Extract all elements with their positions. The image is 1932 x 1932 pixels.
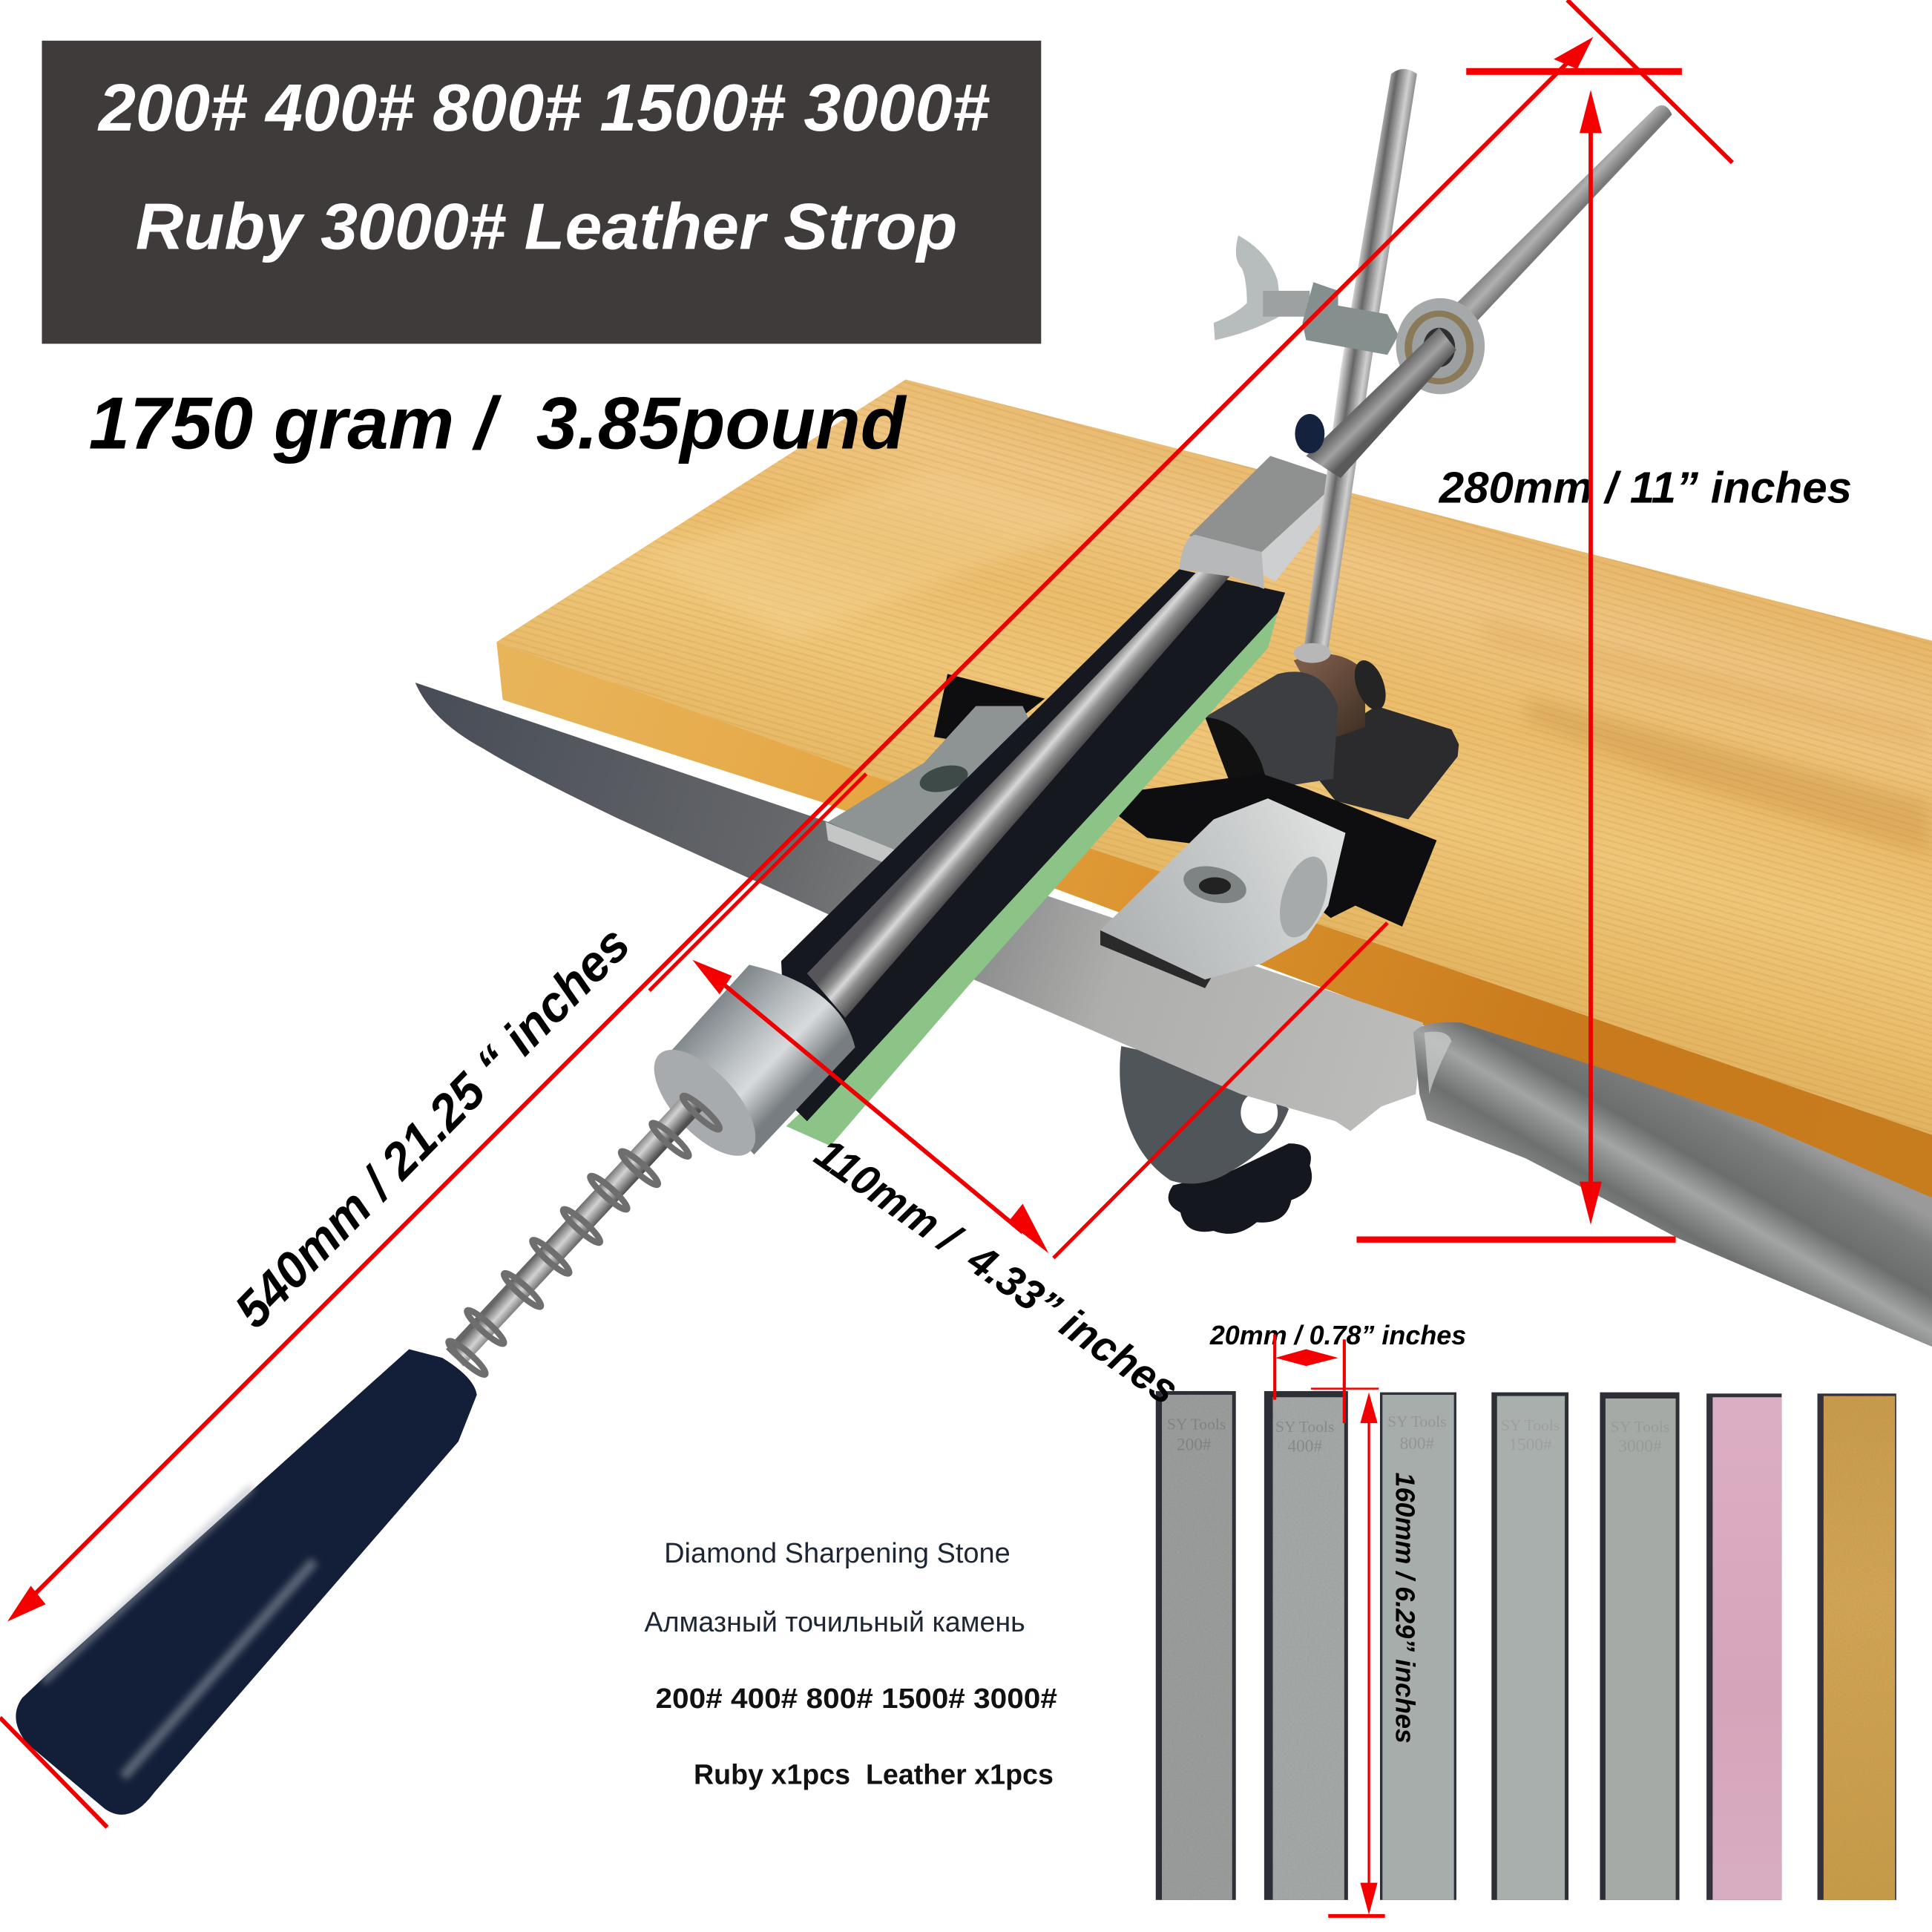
rod clamp assembly (1214, 235, 1485, 478)
leather strop (1818, 1393, 1896, 1900)
rod foot (1294, 643, 1331, 663)
grip body (16, 1349, 477, 1815)
rear rail bracket (934, 674, 1045, 746)
spring coil (1294, 654, 1365, 737)
ruby and leather heading: Ruby 3000# Leather Strop (136, 189, 957, 263)
top block side (1262, 479, 1341, 582)
arrow: stone width 20mm (1275, 1335, 1344, 1423)
board front face (496, 642, 1932, 1214)
stone 3000#: SY Tools (1611, 1418, 1669, 1436)
weight label: 1750 gram / 3.85pound (89, 382, 907, 465)
sharpener base and rail (934, 654, 1459, 927)
stone 200#: 200# (1177, 1436, 1212, 1455)
front end cylinder (666, 965, 855, 1154)
arrow: height 280mm (1356, 71, 1682, 1240)
coils (445, 1092, 723, 1378)
grit list heading: 200# 400# 800# 1500# 3000# (97, 71, 990, 145)
height label: 280mm / 11” inches (1439, 463, 1852, 513)
stone 400# (1264, 1391, 1348, 1900)
stone 800# (1380, 1393, 1456, 1900)
stone 200# (1156, 1391, 1236, 1900)
blue knob (1295, 414, 1324, 453)
clamp plate shadow lip (1100, 930, 1214, 988)
top block face (1189, 456, 1341, 552)
stone 3000#: 3000# (1618, 1436, 1662, 1456)
stone width label: 20mm / 0.78” inches (1209, 1321, 1466, 1350)
board top face (496, 380, 1932, 1135)
stone 3000# (1600, 1393, 1680, 1900)
black grip handle (16, 1349, 477, 1815)
stone length label: 160mm / 6.29” inches (1390, 1473, 1420, 1744)
wooden board (496, 380, 1932, 1214)
clamp hole (1241, 1091, 1278, 1134)
stone 1500#: SY Tools (1501, 1416, 1560, 1434)
clamp block (1302, 282, 1399, 355)
center highlight (123, 1561, 314, 1777)
stone 200#: SY Tools (1167, 1415, 1226, 1433)
steel holder rod (807, 558, 1236, 1018)
wing nut (1214, 235, 1281, 340)
width label: 110mm / 4.33” inches (806, 1129, 1187, 1414)
rear clamp (826, 706, 1033, 865)
russian description: Алмазный точильный камень (645, 1606, 1025, 1638)
ruby stone (1706, 1393, 1781, 1900)
stone 400#: SY Tools (1275, 1418, 1334, 1436)
arrow: stone length 160mm (1311, 1389, 1385, 1916)
stones row (1156, 1391, 1896, 1900)
black stone backing (781, 569, 1285, 1121)
thread (1263, 291, 1310, 317)
knife handle (1413, 1022, 1932, 1347)
spring collar (1349, 656, 1392, 714)
shaft (446, 1091, 703, 1367)
rear clamp hole (917, 760, 970, 797)
front rail (1115, 774, 1436, 927)
long guide rod (1444, 105, 1672, 335)
stone 800#: SY Tools (1387, 1413, 1447, 1430)
bearing eye (1396, 298, 1485, 394)
rod over bearing (1306, 328, 1456, 478)
arrow: width 110mm (692, 923, 1387, 1258)
vertical guide rod (1304, 69, 1417, 649)
banner background (42, 41, 1041, 344)
front clamp (1100, 798, 1346, 988)
rear clamp plate (828, 706, 1033, 852)
blade (415, 683, 1423, 1131)
grit list: 200# 400# 800# 1500# 3000# (656, 1683, 1057, 1715)
clamp ring under blade (1120, 1046, 1289, 1183)
rear clamp lip (826, 822, 896, 865)
bolster highlight (1425, 1032, 1451, 1094)
base plate (1306, 706, 1459, 819)
spring shaft and coils (445, 1091, 723, 1378)
upper highlight (43, 1487, 252, 1682)
top block collar (1179, 535, 1264, 589)
stone 1500# (1491, 1393, 1568, 1900)
stone 400#: 400# (1287, 1436, 1322, 1456)
clamp screw hole (1180, 860, 1250, 909)
green stone (786, 612, 1278, 1146)
pivot body (1205, 671, 1338, 789)
bearing center (1423, 328, 1455, 367)
title banner (42, 41, 1041, 344)
clamp tube hole (1271, 851, 1336, 943)
bearing ring (1404, 310, 1473, 384)
kitchen knife (415, 683, 1932, 1347)
bearing inner (1412, 317, 1466, 378)
clamp knob (1169, 1143, 1312, 1234)
length label: 540mm / 21.25 “ inches (224, 916, 641, 1338)
parts list (645, 1537, 1057, 1791)
stone 800#: 800# (1400, 1434, 1434, 1453)
clamp screw (1199, 877, 1231, 895)
end cap (637, 1033, 772, 1172)
pivot fork opening (1205, 717, 1269, 789)
english description: Diamond Sharpening Stone (664, 1537, 1011, 1569)
stone 1500#: 1500# (1509, 1436, 1552, 1455)
stone holder (637, 456, 1341, 1172)
quantity list: Ruby x1pcs Leather x1pcs (694, 1759, 1054, 1791)
clamp plate (1100, 798, 1346, 979)
